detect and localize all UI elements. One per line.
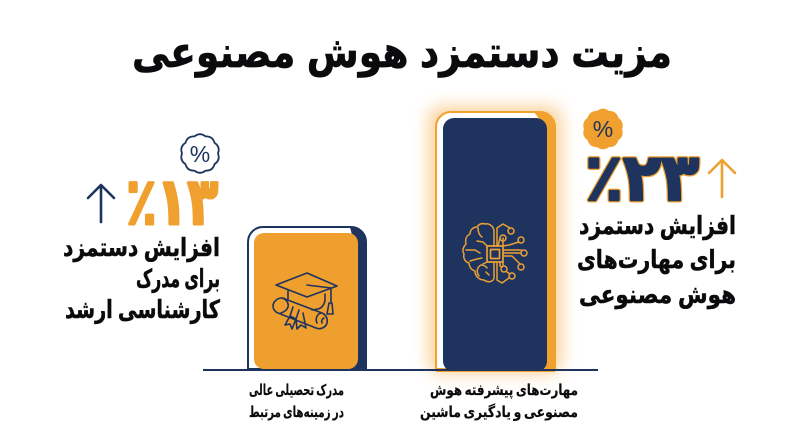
text — [577, 211, 736, 310]
label: graduate degree — [249, 381, 344, 421]
text: برای مهارت‌های — [577, 245, 736, 275]
icon: percent badge outline: % — [190, 141, 210, 167]
stat: 13 percent: ٪۱۳ — [126, 165, 218, 240]
icon: percent badge orange — [584, 110, 622, 148]
arrow up orange — [709, 160, 735, 197]
icon: graduation cap and diploma — [273, 273, 337, 329]
icon: percent badge orange: % — [593, 116, 613, 142]
arrow up navy — [88, 185, 114, 222]
callout: 23 percent — [577, 110, 736, 310]
label: graduate degree: در زمینه‌های مرتبط — [249, 403, 344, 421]
stat: 23 percent: ٪۲۳ — [585, 141, 699, 216]
baseline — [203, 369, 598, 371]
label: advanced AI skills: مهارت‌های پیشرفته هوش — [430, 381, 578, 400]
text: افزایش دستمزد — [63, 233, 220, 263]
text: افزایش دستمزد — [579, 211, 736, 241]
callout: 13 percent — [63, 134, 220, 324]
label: advanced AI skills: مصنوعی و یادگیری ماشین — [420, 403, 578, 421]
icon: AI brain chip — [463, 224, 527, 283]
title: مزیت دستمزد هوش مصنوعی — [132, 28, 672, 78]
icon: percent badge outline — [181, 134, 219, 173]
text: برای مدرک — [136, 264, 220, 294]
text: هوش مصنوعی — [579, 280, 736, 310]
text: کارشناسی ارشد — [65, 295, 220, 324]
bar: advanced AI skills — [428, 106, 562, 374]
bar: graduate degree — [248, 227, 366, 369]
label: graduate degree: مدرک تحصیلی عالی — [249, 381, 344, 399]
text — [63, 233, 220, 324]
label: advanced AI skills — [420, 381, 578, 421]
stat: 23 percent: ٪۲۳ — [585, 141, 699, 216]
